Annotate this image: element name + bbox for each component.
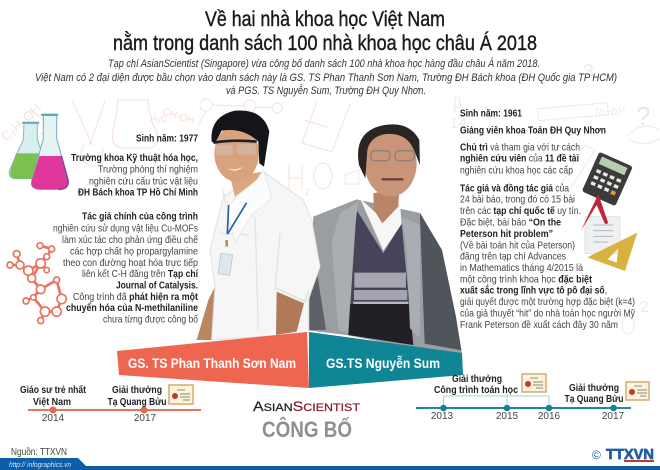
left biography text: Sinh năm: 1977	[136, 132, 198, 144]
left biography text	[53, 132, 199, 326]
right timeline: 2013	[431, 411, 454, 422]
right biography text: Tác giả và đồng tác giả của	[460, 182, 569, 194]
right biography text: một công trình khoa học đặc biệt	[460, 274, 592, 286]
left biography text: Journal of Catalysis.	[116, 280, 198, 292]
background doodles: chemistry: H₃C	[150, 114, 167, 124]
title: nằm trong danh sách 100 nhà khoa học châu Á 2018	[113, 32, 537, 55]
right timeline: 2017	[602, 411, 625, 422]
background doodles: chemistry: 2	[305, 188, 310, 197]
logo: AsianScientist, Công bố	[253, 398, 360, 442]
left biography text: các hợp chất họ propargylamine	[70, 246, 198, 258]
right biography text: in Mathematics tháng 4/2015 là	[460, 262, 583, 274]
right timeline: Tạ Quang Bửu	[564, 393, 624, 405]
right timeline: Giải thưởng	[452, 373, 502, 385]
left biography text: theo con đường hoạt hóa trực tiếp	[63, 257, 198, 269]
right biography text: nghiên cứu viên của 11 đề tài	[460, 152, 579, 164]
left biography text: Tác giả chính của công trình	[82, 210, 198, 222]
right biography text: Sinh năm: 1961	[460, 108, 522, 120]
right biography text: Frank Peterson đề xuất cách đây 30 năm	[460, 319, 618, 331]
title	[113, 8, 537, 55]
left timeline: Việt Nam	[33, 396, 71, 408]
icon: certificate	[522, 374, 546, 392]
left biography text: Trường khoa Kỹ thuật hóa học,	[71, 152, 198, 164]
background doodles: maths: ?	[636, 101, 650, 131]
left timeline: 2014	[42, 413, 65, 424]
right biography text: trên các tạp chí quốc tế uy tín.	[460, 205, 581, 217]
background doodles: maths	[345, 61, 660, 334]
right biography text: xuất sắc trong lĩnh vực tô pô đại số,	[460, 284, 607, 296]
left timeline: Giải thưởng	[112, 384, 162, 396]
left timeline: 2017	[134, 413, 157, 424]
background doodles: maths: 3	[583, 61, 594, 83]
left timeline: Tạ Quang Bửu	[108, 396, 166, 408]
footer bar: http:// infographics.vn	[9, 460, 71, 469]
right timeline	[416, 373, 649, 422]
left biography text: Công trình đã phát hiện ra một	[73, 291, 198, 303]
left biography text: Trường phòng thí nghiệm	[98, 164, 198, 176]
photo: Nguyễn Sum	[309, 124, 462, 353]
background doodles: maths: (a+b)²	[595, 106, 625, 118]
right biography text: nghiên cứu khoa học các cấp	[460, 164, 573, 176]
right biography text: Đặc biệt, bài báo “On the	[460, 216, 561, 228]
right biography text: đăng trên tạp chí Advances	[460, 250, 566, 262]
left biography text: ĐH Bách khoa TP Hồ Chí Minh	[78, 186, 198, 198]
left timeline	[20, 384, 201, 424]
right biography text: (Về bài toán hit của Peterson)	[460, 240, 575, 252]
name banner: Nguyễn Sum	[309, 332, 463, 388]
logo: AsianScientist, Công bố: CÔNG BỐ	[262, 416, 352, 442]
background doodles: chemistry: CH-OH	[161, 106, 196, 127]
footer bar	[0, 458, 660, 470]
left biography text: nghiên cứu sử dụng vật liệu Cu-MOFs	[53, 222, 198, 234]
right biography text: Chủ trì và tham gia với tư cách	[460, 142, 580, 154]
left biography text: chưa từng được công bố	[103, 314, 198, 326]
name banner: Phan Thanh Sơn Nam: GS. TS Phan Thanh Sơn Nam	[128, 355, 296, 371]
source: Nguồn: TTXVN	[11, 446, 67, 458]
logo: TTXVN: ©	[592, 448, 601, 462]
right timeline: Công trình toán học	[434, 384, 518, 396]
icon: maths tools	[581, 152, 637, 271]
right timeline: Giải thưởng	[569, 382, 619, 394]
background doodles: maths: 2	[640, 299, 649, 316]
name banner: Phan Thanh Sơn Nam	[117, 332, 309, 388]
background doodles: chemistry	[0, 99, 350, 197]
icon: molecule	[7, 243, 66, 324]
photo: Phan Thanh Sơn Nam	[197, 110, 320, 340]
right timeline: 2015	[496, 411, 519, 422]
intro paragraph: Tạp chí AsianScientist (Singapore) vừa công bố danh sách 100 nhà khoa học hàng đầu châu Á năm 2018.	[108, 57, 540, 70]
left biography text: nghiên cứu cấu trúc vật liệu	[89, 176, 198, 188]
icon: lab flasks	[9, 114, 68, 189]
background doodles: maths: β	[453, 95, 462, 112]
right biography text: Peterson hit problem”	[460, 228, 553, 240]
title: Về hai nhà khoa học Việt Nam	[205, 8, 445, 31]
background doodles: maths: 14	[450, 115, 467, 132]
icon: certificate	[626, 382, 649, 400]
right biography text: 24 bài báo, trong đó có 15 bài	[460, 194, 575, 206]
intro paragraph: và PGS. TS Nguyễn Sum, Trường ĐH Quy Nhơn.	[226, 84, 426, 97]
icon: certificate	[169, 385, 193, 404]
name banner: Nguyễn Sum: GS.TS Nguyễn Sum	[326, 355, 440, 371]
logo: TTXVN: TTXVN	[606, 446, 654, 463]
right timeline: 2016	[538, 411, 561, 422]
intro paragraph	[35, 57, 617, 97]
left biography text: chuyển hóa của N-methilaniline	[66, 302, 198, 314]
left timeline: Giáo sư trẻ nhất	[20, 384, 86, 396]
right biography text	[460, 108, 636, 331]
left biography text: làm xúc tác cho phản ứng điều chế	[62, 234, 198, 246]
left biography text: liên kết C-H đăng trên Tạp chí	[82, 268, 199, 280]
right biography text: Giảng viên khoa Toán ĐH Quy Nhơn	[460, 124, 606, 136]
logo: AsianScientist, Công bố: ASIANSCIENTIST	[253, 398, 360, 414]
